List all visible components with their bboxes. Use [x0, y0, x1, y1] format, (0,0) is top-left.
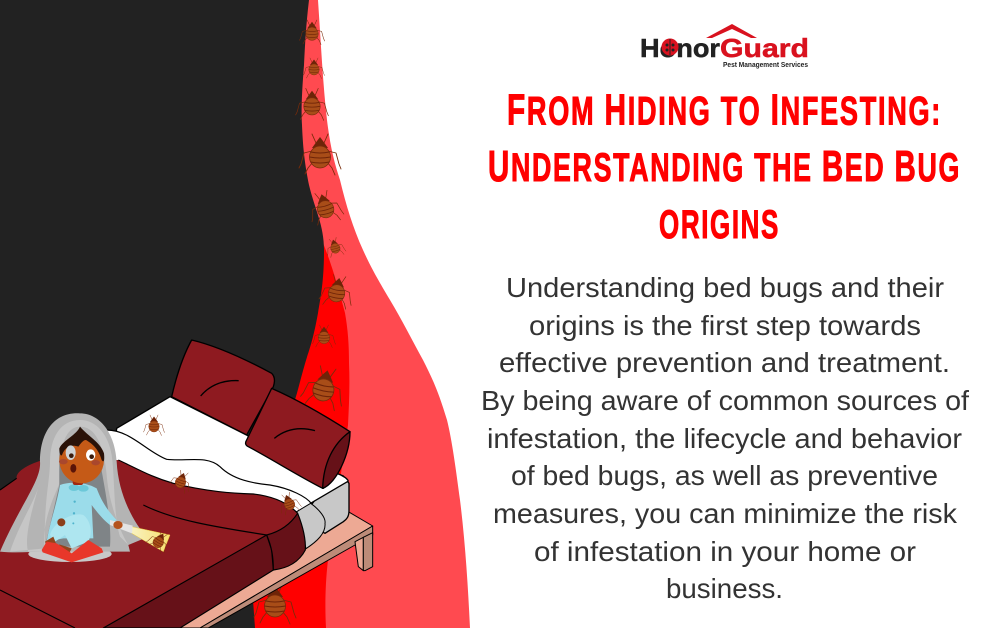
bug on sheet	[168, 468, 194, 494]
bug 4	[299, 134, 341, 175]
logo: HonorGuard	[640, 24, 809, 69]
body paragraph	[481, 272, 969, 604]
flashlight beam	[132, 527, 170, 552]
sheet band	[297, 503, 325, 549]
fist	[57, 518, 65, 526]
girl under veil	[0, 413, 170, 562]
word Honor: Honor	[640, 33, 720, 63]
body paragraph: effective prevention and treatment.	[499, 347, 950, 378]
bug in flashlight beam	[145, 527, 173, 555]
neck	[73, 479, 83, 485]
background: light red wave	[240, 0, 470, 628]
buttons	[72, 500, 76, 524]
title line 2: UNDERSTANDING THE BED BUG	[488, 142, 961, 191]
girl hand	[113, 521, 123, 529]
tagline: Pest Management Services	[723, 62, 808, 69]
title line 3: ORIGINS	[659, 203, 780, 247]
body paragraph: origins is the first step towards	[529, 310, 921, 341]
bug 2	[304, 58, 324, 78]
blanket crease	[0, 478, 267, 628]
cheeks	[59, 459, 100, 465]
body paragraph: of bed bugs, as well as preventive	[511, 460, 938, 491]
bug on mattress	[144, 415, 164, 436]
bed bugs on the bed	[144, 415, 302, 555]
pillow 1	[172, 340, 274, 435]
mattress	[113, 397, 349, 533]
pajama legs	[50, 514, 91, 548]
body paragraph: business.	[666, 573, 783, 604]
blanket	[0, 460, 298, 628]
body paragraph: Understanding bed bugs and their	[506, 272, 944, 303]
flashlight	[110, 520, 133, 533]
roof	[706, 24, 757, 38]
veil outer	[0, 413, 147, 552]
background: dark panel	[0, 0, 324, 628]
veil lighter band	[10, 420, 128, 552]
hair	[59, 427, 104, 461]
shadow under veil	[28, 546, 112, 562]
bug on band	[276, 490, 302, 516]
sheet fold	[107, 430, 312, 513]
title	[488, 86, 961, 247]
body paragraph: of infestation in your home or	[534, 536, 916, 567]
bug 5	[305, 188, 345, 227]
bug 8	[312, 325, 336, 348]
bug 9	[299, 363, 349, 412]
body paragraph: infestation, the lifecycle and behavior	[487, 423, 962, 454]
blanket side	[103, 535, 273, 628]
dark interior of veil	[45, 448, 110, 547]
bug 10	[254, 583, 296, 624]
pajama arm and torso	[47, 483, 117, 542]
bed bugs trail	[254, 20, 356, 624]
illustration: bed and girl	[0, 340, 373, 628]
blanket top edge	[118, 460, 298, 513]
feet	[45, 537, 72, 555]
eyes	[66, 445, 95, 461]
bug 1	[299, 20, 325, 45]
bed frame	[177, 512, 373, 628]
bug 3	[296, 88, 328, 120]
blanket flap	[267, 513, 305, 570]
head	[59, 437, 104, 483]
body paragraph: measures, you can minimize the risk	[493, 498, 958, 529]
body paragraph: By being aware of common sources of	[481, 385, 969, 416]
bug 6	[324, 236, 347, 259]
word Guard: Guard	[720, 33, 809, 63]
red book	[42, 540, 103, 562]
bug 7	[318, 273, 356, 310]
ladybird	[662, 38, 678, 56]
collar	[69, 484, 89, 492]
pillow 2	[246, 388, 350, 488]
background: bright red wave	[240, 243, 349, 628]
mouth	[70, 464, 76, 473]
